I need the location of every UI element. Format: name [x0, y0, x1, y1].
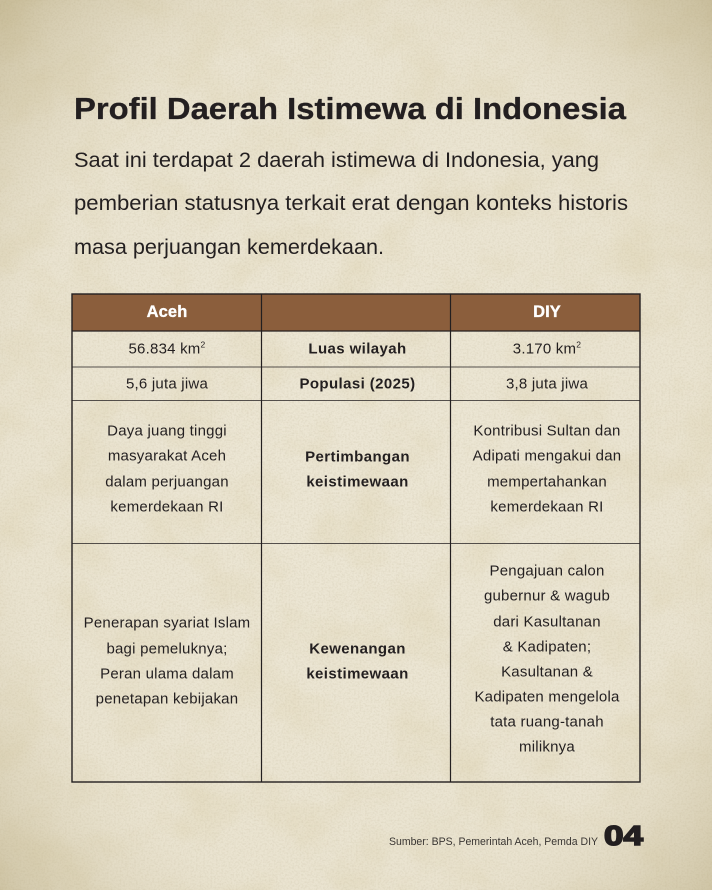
- row: kewenangan keistimewaan: & Kadipaten;: [503, 638, 591, 656]
- title: Profil Daerah Istimewa di Indonesia: [74, 91, 627, 126]
- row: pertimbangan keistimewaan: [105, 422, 621, 516]
- row: kewenangan keistimewaan: Penerapan syariat Islam: [84, 614, 250, 632]
- row: luas wilayah: 2: [576, 340, 581, 350]
- row: pertimbangan keistimewaan: dalam perjuangan: [105, 474, 229, 490]
- row: populasi: 5,6 juta jiwa: [126, 376, 208, 392]
- row: pertimbangan keistimewaan: Daya juang tinggi: [107, 422, 227, 440]
- intro paragraph: Saat ini terdapat 2 daerah istimewa di Indonesia, yang: [74, 148, 599, 172]
- row: luas wilayah: 2: [201, 340, 206, 350]
- row: luas wilayah: [129, 340, 581, 358]
- row: populasi: 3,8 juta jiwa: [506, 376, 588, 392]
- row: kewenangan keistimewaan: miliknya: [519, 738, 575, 756]
- source note: Sumber: BPS, Pemerintah Aceh, Pemda DIY: [389, 836, 599, 848]
- row: kewenangan keistimewaan: Pengajuan calon: [489, 562, 605, 580]
- row: kewenangan keistimewaan: Kasultanan &: [501, 664, 593, 680]
- row: kewenangan keistimewaan: keistimewaan: [306, 666, 409, 682]
- table header row: Aceh: [147, 303, 187, 321]
- page number: 04: [604, 820, 644, 851]
- row: pertimbangan keistimewaan: mempertahankan: [487, 474, 607, 490]
- table grid: [72, 294, 640, 782]
- row: luas wilayah: 3.170 km: [513, 340, 576, 358]
- row: pertimbangan keistimewaan: Kontribusi Sultan dan: [473, 422, 621, 440]
- row: kewenangan keistimewaan: penetapan kebijakan: [96, 690, 238, 708]
- row: populasi: Populasi (2025): [299, 376, 416, 392]
- row: luas wilayah: 56.834 km: [129, 340, 201, 358]
- row: kewenangan keistimewaan: bagi pemeluknya;: [106, 640, 228, 658]
- comparison table: [72, 294, 640, 782]
- row: pertimbangan keistimewaan: kemerdekaan RI: [490, 498, 604, 516]
- row: pertimbangan keistimewaan: keistimewaan: [306, 474, 409, 490]
- row: kewenangan keistimewaan: dari Kasultanan: [493, 614, 601, 630]
- row: luas wilayah: Luas wilayah: [308, 340, 407, 358]
- table header row: DIY: [533, 303, 561, 321]
- row: kewenangan keistimewaan: Kadipaten mengelola: [474, 688, 620, 706]
- row: pertimbangan keistimewaan: masyarakat Aceh: [108, 448, 226, 464]
- intro paragraph: masa perjuangan kemerdekaan.: [74, 235, 384, 259]
- row: kewenangan keistimewaan: tata ruang-tanah: [490, 714, 604, 730]
- intro paragraph: pemberian statusnya terkait erat dengan konteks historis: [74, 191, 628, 215]
- row: kewenangan keistimewaan: Kewenangan: [309, 640, 406, 658]
- row: kewenangan keistimewaan: gubernur & wagub: [484, 588, 610, 604]
- row: populasi: [126, 376, 588, 392]
- row: pertimbangan keistimewaan: Pertimbangan: [305, 448, 410, 466]
- row: pertimbangan keistimewaan: Adipati mengakui dan: [473, 448, 621, 464]
- intro paragraph: [74, 148, 628, 259]
- row: kewenangan keistimewaan: Peran ulama dalam: [100, 666, 234, 682]
- table header row: [72, 294, 640, 331]
- row: kewenangan keistimewaan: [84, 562, 620, 756]
- row: pertimbangan keistimewaan: kemerdekaan RI: [110, 498, 224, 516]
